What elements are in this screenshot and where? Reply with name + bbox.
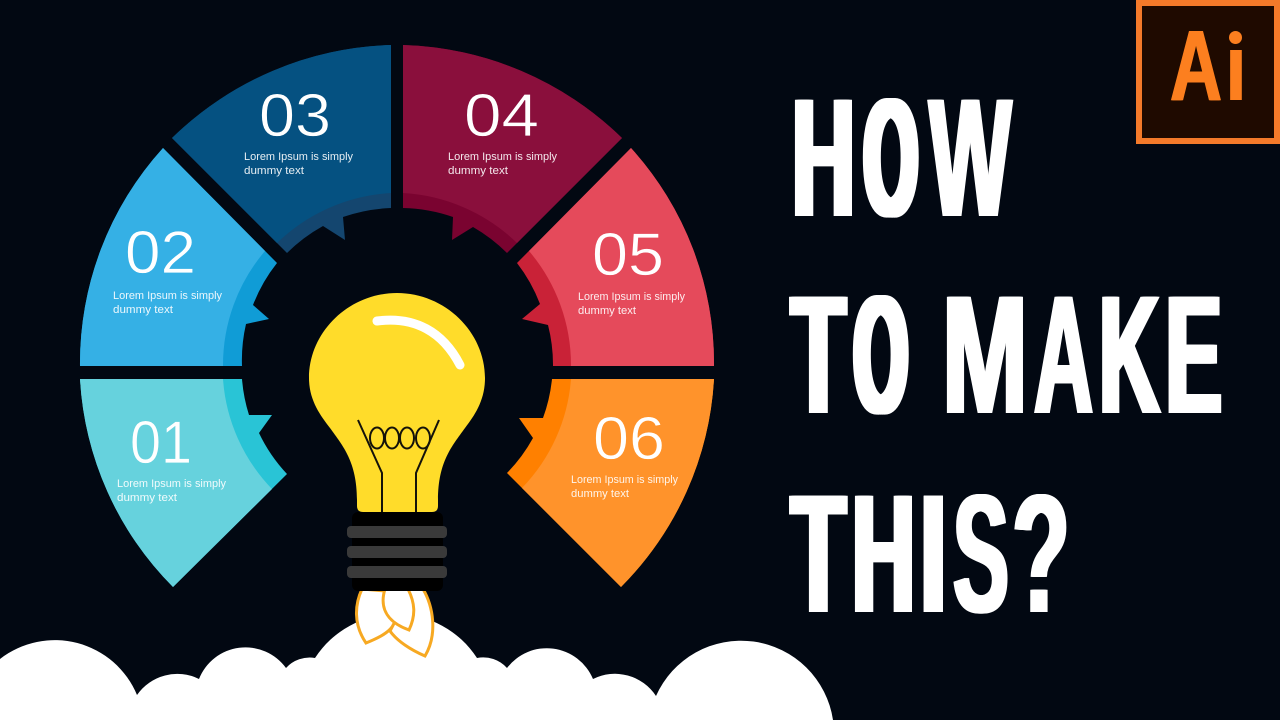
clouds [0,614,833,720]
panel: segment 06: 06 [593,405,665,472]
icon: illustrator logo [1136,0,1280,144]
heading: how to make this: S [952,459,1008,648]
panel: segment 06 [507,379,714,587]
panel: segment 02: 02 [125,219,196,286]
panel: segment 04: 04 [464,82,539,149]
panel: segment 02 [80,148,277,366]
panel: segment 03 [172,45,391,253]
heading: how to make this: H [792,63,855,252]
panel: segment 05 [517,148,714,366]
panel: segment 03: 03 [259,82,331,149]
icon: rocket flames [356,589,433,656]
icon: light bulb [309,293,485,591]
heading: how to make this: K [1099,260,1160,449]
heading: how to make this: O [854,260,908,449]
panel: segment 06: dummy text [571,488,630,500]
heading: how to make this [789,63,1222,648]
panel: segment 01: dummy text [117,492,178,504]
panel: segment 01: 01 [130,409,192,476]
heading: how to make this: E [1166,260,1222,449]
heading: how to make this: I [915,459,952,648]
panel: segment 06: Lorem Ipsum is simply [571,474,678,486]
panel: segment 03: dummy text [244,165,305,177]
panel: segment 02: Lorem Ipsum is simply [113,290,222,302]
panel: segment 04 [403,45,622,253]
heading: how to make this: T [791,260,846,449]
panel: segment 03: Lorem Ipsum is simply [244,151,353,163]
panel: segment 02: dummy text [113,304,174,316]
icon: illustrator logo: Ai [1170,10,1250,122]
panel: segment 01 [80,379,287,587]
panel: segment 05: Lorem Ipsum is simply [578,291,685,303]
panel: segment 04: Lorem Ipsum is simply [448,151,557,163]
heading: how to make this: M [942,260,1028,449]
panel: segment 04: dummy text [448,165,509,177]
heading: how to make this: O [864,63,918,252]
heading: how to make this: T [791,459,846,648]
heading: how to make this: A [1034,260,1093,449]
heading: how to make this: H [852,459,915,648]
panel: segment 01: Lorem Ipsum is simply [117,478,226,490]
heading: how to make this: W [929,63,1011,252]
heading: how to make this: ? [1012,459,1069,648]
panel: segment 05: 05 [592,221,664,288]
panel: segment 05: dummy text [578,305,637,317]
